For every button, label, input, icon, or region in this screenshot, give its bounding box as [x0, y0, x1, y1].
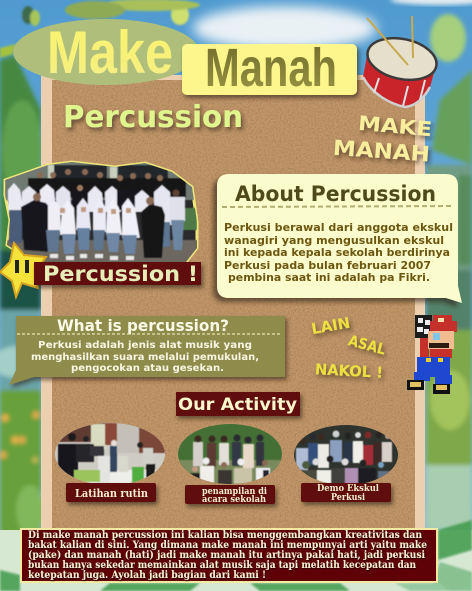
- label: Make Manah: [332, 111, 433, 166]
- caption: Demo Ekskul Perkusi: Demo Ekskul: [317, 484, 380, 494]
- panel: closing invitation text: [21, 529, 437, 582]
- text block: what is percussion: Perkusi adalah jenis alat musik yang: [38, 340, 252, 351]
- icon: red drum with sticks: [363, 16, 440, 107]
- panel: What is percussion: [9, 316, 285, 385]
- heading: About Percussion: About Percussion: [235, 182, 436, 206]
- title: Make: Make: [47, 19, 173, 86]
- back row girls: [8, 183, 24, 212]
- activity photo 1: Latihan rutin: [55, 422, 167, 486]
- caption: penampilan di acara sekolah: [185, 485, 275, 505]
- heading: What is percussion: What is percussion?: [57, 316, 229, 335]
- heading: Percussion: Percussion: [63, 100, 243, 135]
- caption: Demo Ekskul Perkusi: [301, 483, 391, 503]
- boy left in black: [21, 200, 53, 252]
- activity photo 2: penampilan: [177, 423, 283, 485]
- panel: closing invitation text: bukan hanya sekedar memainkan alat musik saja tapi melatih kecepatan dan: [28, 559, 416, 571]
- label: Lain Asal Nakol: LAIN: [310, 314, 351, 338]
- text block: what is percussion: [31, 340, 259, 374]
- caption: Demo Ekskul Perkusi: Perkusi: [331, 493, 366, 503]
- label: Lain Asal Nakol: NAKOL !: [315, 360, 383, 382]
- text block: about: ini kepada kepala sekolah berdirinya: [224, 246, 450, 259]
- shoes: [50, 254, 58, 258]
- caption: Latihan rutin: Latihan rutin: [75, 487, 148, 500]
- label: Lain Asal Nakol: [310, 314, 388, 382]
- text block: about: wanagiri yang mengusulkan ekskul: [224, 234, 444, 247]
- title: Manah: Manah: [205, 38, 337, 98]
- boy right in black: [141, 204, 165, 258]
- text block: about: Perkusi berawal dari anggota ekskul: [224, 221, 453, 234]
- text block: about: pembina saat ini adalah pa Fikri.: [228, 271, 430, 284]
- caption: penampilan di acara sekolah: acara sekolah: [202, 495, 266, 505]
- icon: pixel Mario: [407, 315, 457, 394]
- text block: what is percussion: pengocokan atau gesekan.: [71, 363, 224, 374]
- activity photo 3: Demo Ekskul: [293, 424, 399, 486]
- front row girls: [48, 200, 61, 232]
- caption: penampilan di acara sekolah: penampilan di: [202, 487, 268, 497]
- banner: Our Activity: Our Activity: [178, 395, 297, 415]
- text block: about: Perkusi pada bulan februari 2007: [224, 259, 431, 272]
- banner: Percussion !: Percussion !: [43, 262, 198, 286]
- panel: About Percussion: [217, 174, 462, 303]
- caption: Latihan rutin: [66, 483, 156, 502]
- group photo with torn yellow border: [5, 160, 200, 265]
- corkboard with wood frame: [41, 75, 425, 533]
- panel: closing invitation text: ketepatan juga. Ayolah jadi bagian dari kami !: [28, 569, 266, 581]
- label: Make Manah: MAKE: [357, 111, 433, 141]
- icon: pixel star: [0, 243, 46, 297]
- panel: closing invitation text: Di make manah percussion ini kalian bisa menggembangkan kreativitas dan: [28, 529, 422, 541]
- back row in black: [28, 178, 186, 198]
- text block: about: [224, 221, 453, 284]
- label: Make Manah: MANAH: [332, 136, 431, 166]
- label: Lain Asal Nakol: ASAL: [346, 331, 388, 359]
- panel: closing invitation text: (pake) dan manah (hati) jadi make manah itu artinya pakai hati, jadi perkusi: [28, 549, 425, 561]
- text block: what is percussion: menghasilkan suara melalui pemukulan,: [31, 352, 259, 363]
